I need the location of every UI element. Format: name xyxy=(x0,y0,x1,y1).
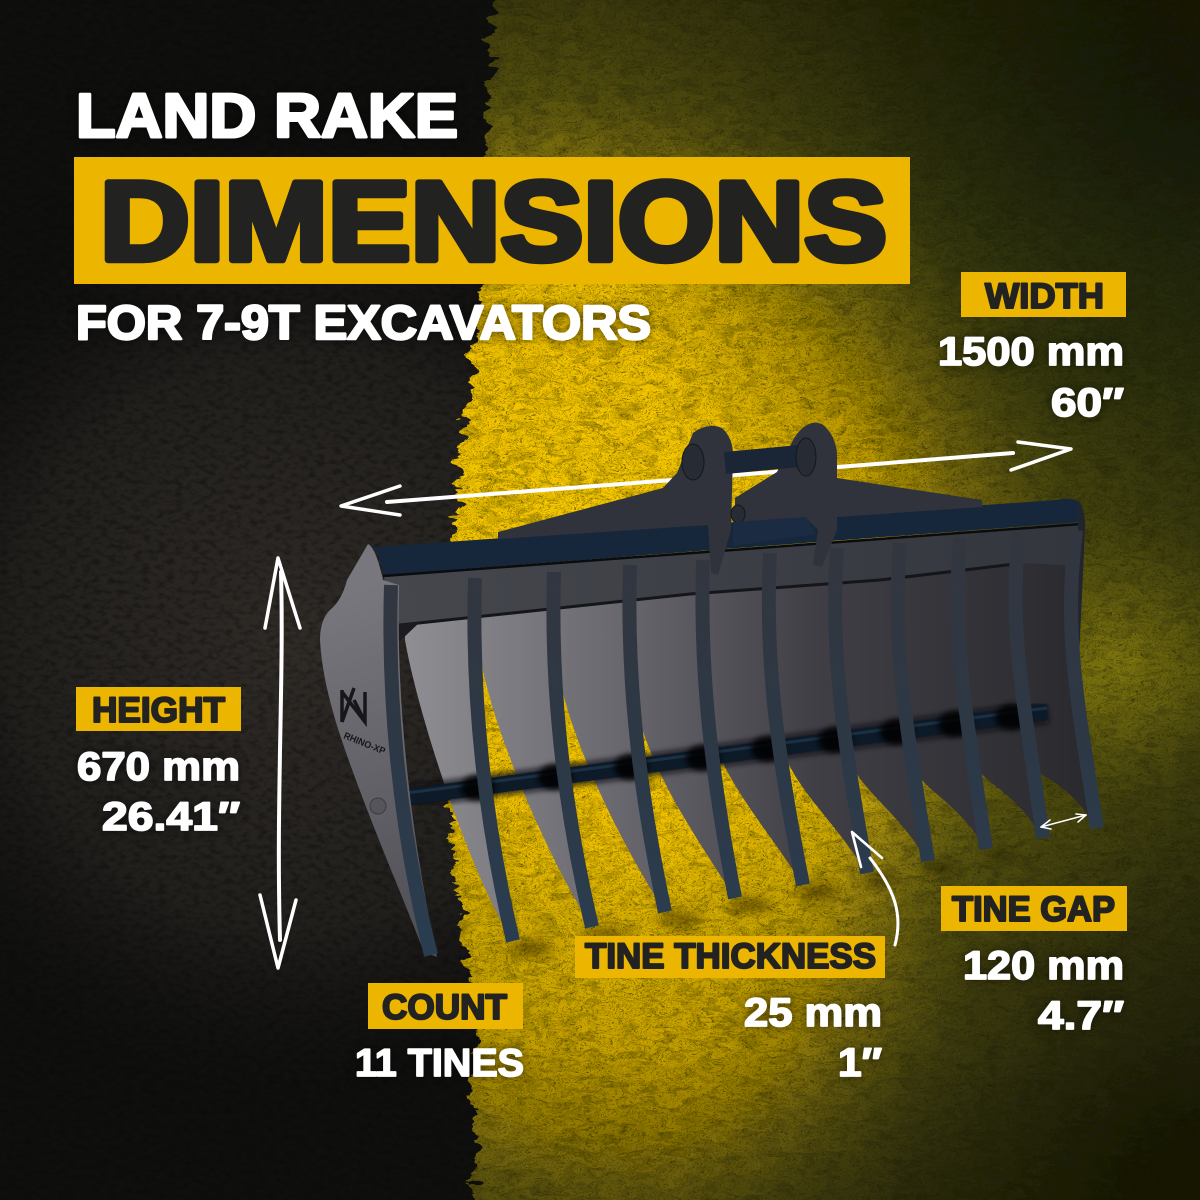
callout: width: 60″ xyxy=(1051,381,1124,425)
pin bosses xyxy=(682,438,816,523)
callout: tine thickness: TINE THICKNESS xyxy=(585,937,876,976)
background: distressed yellow panel xyxy=(444,0,1200,1200)
tine blades xyxy=(405,530,1097,941)
arrow: width xyxy=(341,442,1071,515)
side plate logo: RHINO-XP xyxy=(342,731,387,757)
side plate bolt xyxy=(370,798,386,814)
callout: count: COUNT xyxy=(382,988,507,1027)
top beam xyxy=(373,499,1082,575)
callout: height: 26.41″ xyxy=(102,795,240,839)
callout: height: 670 mm xyxy=(77,745,240,789)
arrow: tine gap xyxy=(1041,814,1086,829)
background: grunge texture xyxy=(440,0,1200,1200)
plate shadow xyxy=(400,563,1023,625)
arrow: tine thickness xyxy=(852,832,898,945)
callout: tine gap: 120 mm xyxy=(963,944,1124,988)
lower beam on bracket xyxy=(733,517,816,546)
callout: width xyxy=(938,272,1126,425)
title banner: DIMENSIONS xyxy=(100,159,887,284)
upper back plate xyxy=(383,523,1080,625)
subtitle: FOR 7-9T EXCAVATORS xyxy=(76,297,651,350)
upper pin xyxy=(725,455,810,463)
right edge of rake xyxy=(1072,500,1085,680)
tube shadows at tines xyxy=(461,704,1029,801)
title xyxy=(74,82,910,350)
callout: tine thickness: 25 mm xyxy=(744,991,882,1035)
side plate logo xyxy=(342,688,387,757)
callout: tine thickness: 1″ xyxy=(838,1041,882,1085)
callout: count xyxy=(355,983,524,1085)
title line: land rake: LAND RAKE xyxy=(76,82,458,151)
callout: height xyxy=(76,687,241,839)
callout: tine gap: 4.7″ xyxy=(1038,994,1124,1038)
left side plate xyxy=(320,544,437,957)
callout: height: HEIGHT xyxy=(92,691,225,730)
beam shadow line xyxy=(383,524,1081,576)
callout: count: 11 TINES xyxy=(355,1042,524,1085)
land rake product illustration xyxy=(320,423,1097,957)
callout: tine gap: TINE GAP xyxy=(952,890,1115,929)
ground shadows under tines xyxy=(508,851,1014,955)
mounting bracket: right xyxy=(735,423,982,567)
callout: width: 1500 mm xyxy=(938,330,1124,374)
callout: tine gap xyxy=(941,886,1127,1038)
tine ribs xyxy=(390,530,1097,955)
cross tube xyxy=(407,708,1047,797)
callout: width: WIDTH xyxy=(985,277,1104,316)
callout: tine thickness xyxy=(575,936,885,1085)
arrow: height xyxy=(260,558,300,968)
shadowed end of plate xyxy=(399,622,420,642)
mounting bracket: left xyxy=(498,426,733,575)
